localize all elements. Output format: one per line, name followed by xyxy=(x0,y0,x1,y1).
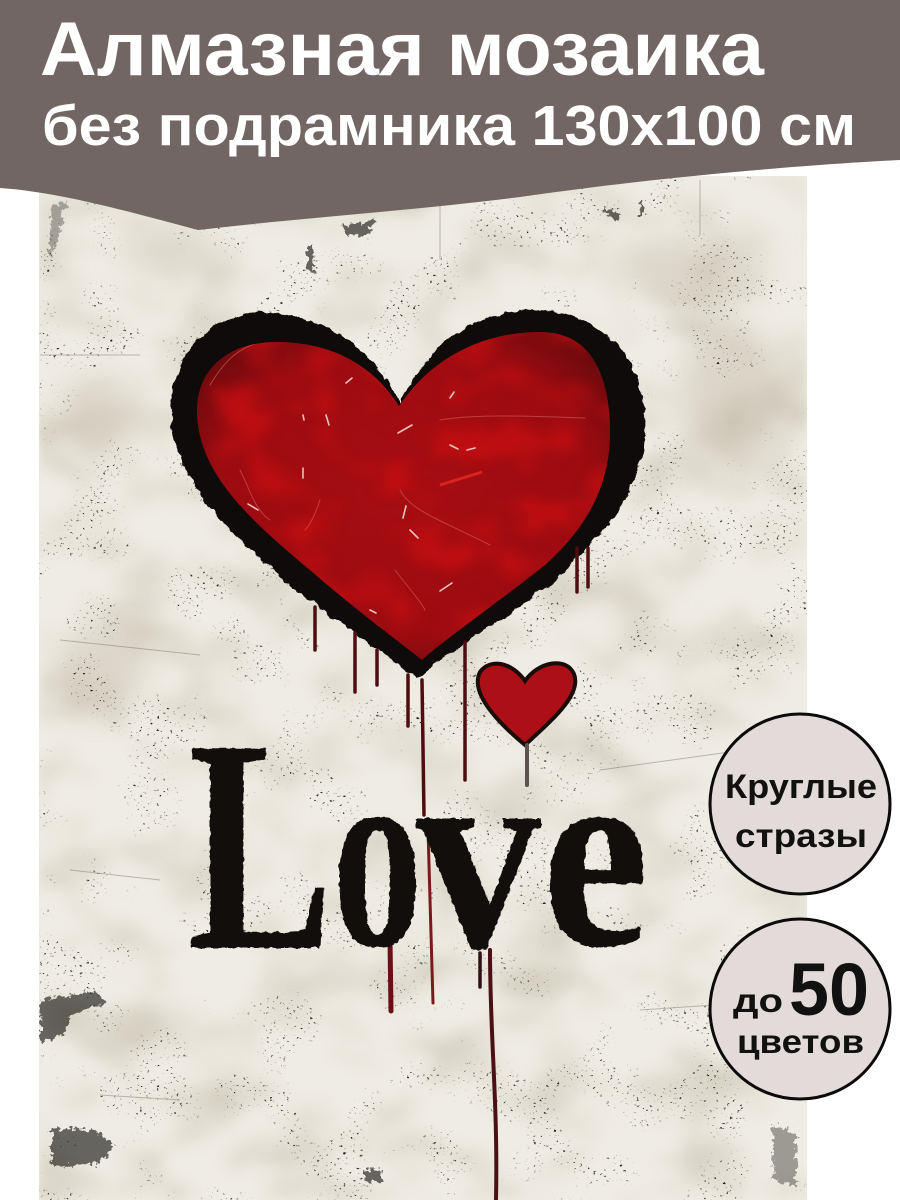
badge: up to 50 colours: цветов xyxy=(737,1023,864,1060)
header banner xyxy=(0,0,900,230)
badge: round rhinestones: стразы xyxy=(735,817,867,854)
paint drips xyxy=(315,548,588,1200)
Love lettering: o xyxy=(332,703,423,1004)
heart red paint xyxy=(190,325,620,665)
large red heart xyxy=(172,310,645,680)
canvas artwork background xyxy=(39,176,807,1200)
subtitle: без подрамника 130х100 см xyxy=(42,94,856,158)
badge: up to 50 colours xyxy=(710,919,890,1099)
Love lettering: L xyxy=(188,676,333,1014)
badge: up to 50 colours: до xyxy=(733,982,783,1019)
small red heart xyxy=(478,663,575,745)
badge: round rhinestones xyxy=(710,714,890,894)
title: Алмазная мозаика xyxy=(40,7,765,92)
badge: up to 50 colours: 50 xyxy=(789,948,869,1031)
Love lettering: v xyxy=(415,697,541,1008)
badge: round rhinestones: Круглые xyxy=(725,768,877,806)
Love lettering: e xyxy=(542,703,649,1004)
Love lettering xyxy=(188,676,649,1014)
